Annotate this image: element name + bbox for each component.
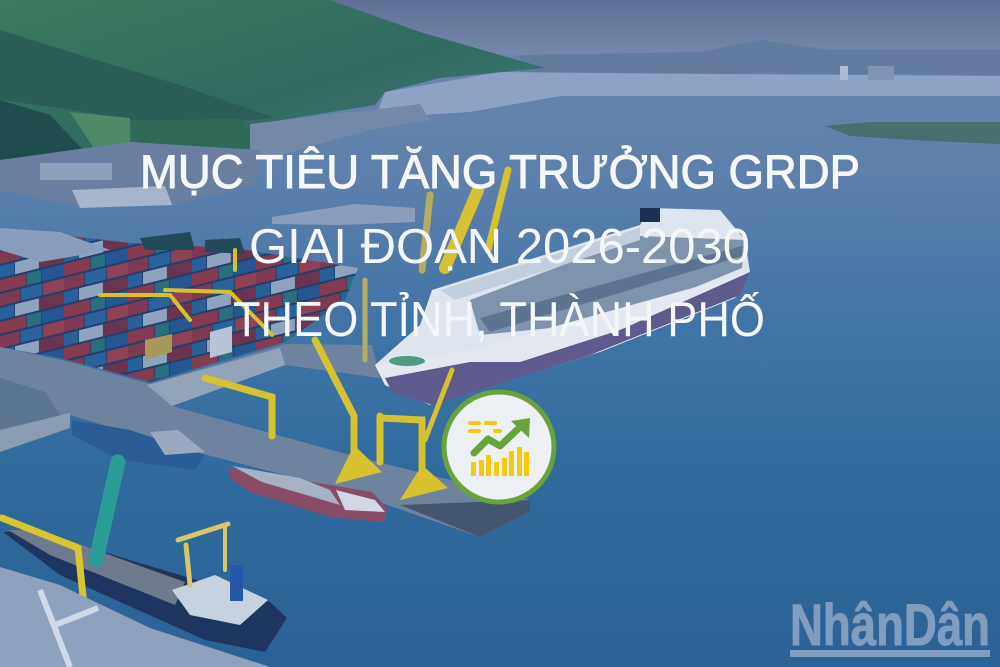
title line 2: GIAI ĐOẠN 2026-2030 bbox=[249, 220, 750, 274]
small ships and pier bbox=[272, 204, 415, 225]
dashes bbox=[468, 421, 502, 433]
bottom ship cranes bbox=[2, 462, 228, 606]
cargo ship at the quay bbox=[72, 420, 205, 470]
white quay crane bbox=[40, 590, 98, 667]
green hillside bbox=[0, 0, 545, 160]
distant city bbox=[375, 72, 1000, 118]
yellow port cranes bbox=[100, 170, 508, 478]
distant mountains bbox=[520, 40, 1000, 75]
island on the right bbox=[825, 122, 1000, 144]
yard quay and roads bbox=[0, 344, 530, 537]
badge circle bbox=[444, 392, 554, 502]
bottom cargo ship bbox=[3, 530, 287, 652]
icon: growth chart badge bbox=[444, 392, 554, 502]
container yard bbox=[0, 228, 358, 382]
title bbox=[140, 145, 860, 347]
tree line bbox=[140, 232, 195, 250]
title line 3: THEO TỈNH, THÀNH PHỐ bbox=[233, 292, 765, 347]
near shoreline buildings bbox=[250, 104, 430, 158]
barge at the quay bbox=[230, 466, 387, 522]
bottom-left quay bbox=[0, 567, 270, 667]
title line 1: MỤC TIÊU TĂNG TRƯỞNG GRDP bbox=[140, 145, 860, 198]
crane bases bbox=[335, 445, 382, 484]
bars bbox=[471, 447, 529, 476]
sky bbox=[0, 0, 1000, 60]
cruise ship bbox=[375, 208, 750, 405]
arrow bbox=[474, 418, 530, 453]
